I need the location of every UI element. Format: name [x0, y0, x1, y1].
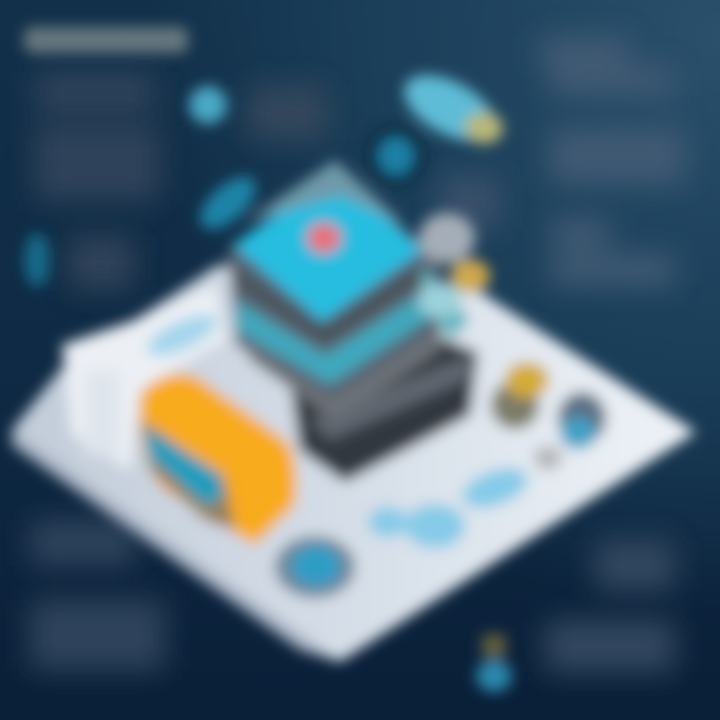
icon: floating card top right: [394, 62, 506, 154]
platform: [12, 265, 696, 662]
middle layers: [228, 170, 470, 420]
red button: [307, 223, 341, 253]
text block: bottom right: [545, 540, 675, 672]
building on the left: [62, 285, 225, 470]
text block: right of small icon: [440, 175, 500, 230]
icon: circle on platform bottom: [275, 536, 355, 598]
text block: left middle: [68, 235, 134, 290]
text block: top right: [540, 36, 685, 286]
icon: left side: [24, 233, 50, 287]
top layer: [233, 160, 424, 322]
icon: blue gauge right: [534, 392, 606, 470]
blue panel on platform left: [142, 306, 222, 364]
lower wide layer: [290, 330, 478, 482]
icon: right of stack: [418, 213, 490, 318]
blue labels on platform: [368, 460, 533, 548]
orange box device: [140, 374, 296, 545]
icon: bottom centre: [476, 634, 512, 692]
icon: yellow badge right: [491, 362, 549, 429]
text block: bottom left: [30, 520, 165, 670]
title: [24, 27, 188, 53]
icon: small floating diamond: [366, 125, 426, 185]
server stack: [228, 160, 478, 482]
text block: top left: [35, 72, 160, 201]
icon: floating leaf: [191, 168, 265, 238]
icon: top left circle: [189, 86, 227, 124]
text block: beside top icon: [248, 85, 328, 140]
